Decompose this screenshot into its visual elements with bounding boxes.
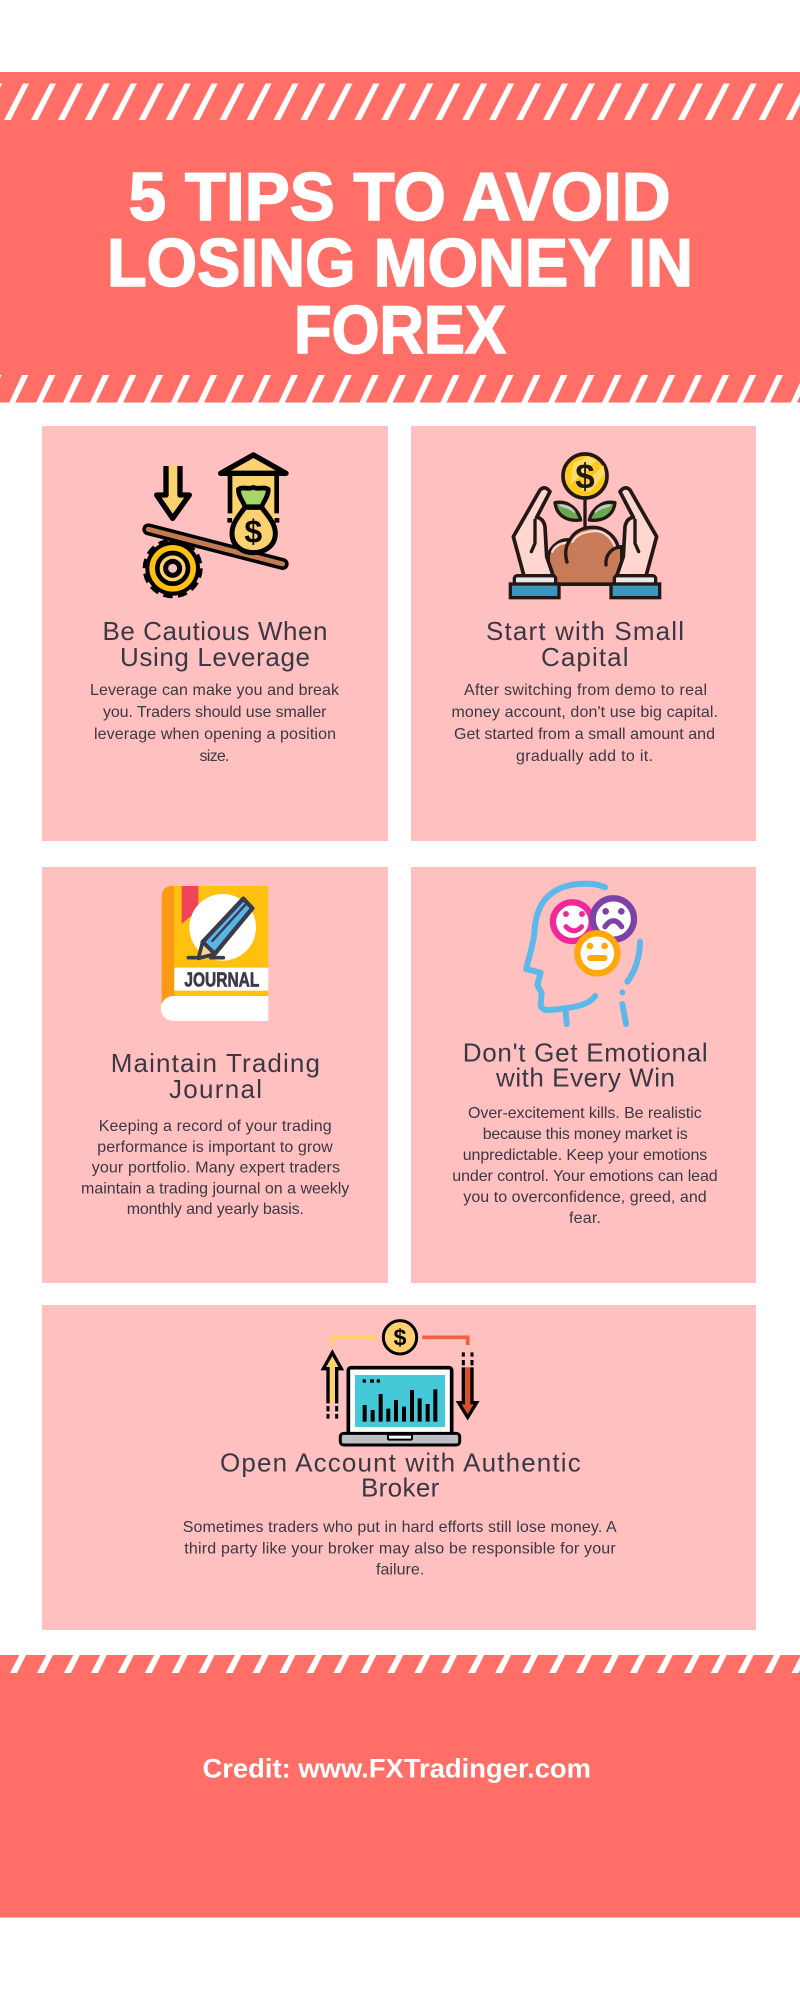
panel: footer banner	[0, 1655, 800, 1918]
heading: Broker	[361, 1473, 440, 1503]
icon: laptop with chart and arrows: $	[394, 1324, 407, 1350]
heading	[102, 616, 328, 672]
panel: maintain trading journal	[42, 867, 388, 1283]
text block: Sometimes traders who put in hard efforts still lose money. A	[183, 1519, 617, 1536]
icon: lever with money bag and gear: $	[244, 513, 262, 549]
title	[107, 159, 693, 368]
panel: start with small capital	[411, 426, 756, 841]
heading: Be Cautious When	[102, 616, 328, 646]
text block	[90, 682, 340, 765]
heading: Using Leverage	[120, 642, 310, 672]
text block: size.	[200, 748, 230, 765]
text block: After switching from demo to real	[464, 682, 707, 699]
panel: don't get emotional	[411, 867, 756, 1283]
text block	[452, 682, 718, 765]
heading: Maintain Trading	[111, 1048, 320, 1078]
heading	[463, 1038, 708, 1093]
text block: Keeping a record of your trading	[99, 1118, 332, 1135]
heading: Journal	[169, 1074, 262, 1104]
heading	[486, 616, 684, 672]
text block: fear.	[569, 1210, 601, 1227]
panel: be cautious with leverage	[42, 426, 388, 841]
text block	[183, 1519, 617, 1579]
text block	[81, 1118, 349, 1218]
icon: head with emotion faces	[526, 884, 640, 1024]
icon: lever with money bag and gear	[145, 455, 286, 596]
text block: Leverage can make you and break	[90, 682, 340, 699]
heading: Start with Small	[486, 616, 684, 646]
heading: Open Account with Authentic	[220, 1448, 581, 1478]
text block: your portfolio. Many expert traders	[92, 1160, 340, 1177]
text block: under control. Your emotions can lead	[452, 1168, 718, 1185]
title: 5 TIPS TO AVOID	[129, 159, 671, 235]
text block: you to overconfidence, greed, and	[463, 1189, 707, 1206]
text block: because this money market is	[483, 1126, 688, 1143]
text block: Get started from a small amount and	[454, 726, 715, 743]
text block: performance is important to grow	[97, 1139, 333, 1156]
text block: gradually add to it.	[516, 748, 653, 765]
title: FOREX	[294, 292, 506, 368]
text block	[452, 1105, 718, 1227]
heading: Capital	[541, 642, 628, 672]
text block: unpredictable. Keep your emotions	[463, 1147, 707, 1164]
icon: laptop with chart and arrows	[323, 1321, 477, 1445]
text block: third party like your broker may also be responsible for your	[184, 1541, 616, 1558]
title: LOSING MONEY IN	[107, 225, 693, 301]
text block: failure.	[376, 1562, 424, 1579]
heading	[220, 1448, 581, 1503]
text block: Over-excitement kills. Be realistic	[468, 1105, 702, 1122]
credit text: Credit: www.FXTradinger.com	[202, 1754, 591, 1784]
heading	[111, 1048, 320, 1104]
heading: Don't Get Emotional	[463, 1038, 708, 1068]
text block: maintain a trading journal on a weekly	[81, 1180, 349, 1197]
icon: hands protecting coin plant	[510, 454, 660, 598]
icon: hands protecting coin plant: $	[575, 457, 595, 496]
panel: header banner	[0, 72, 800, 402]
heading: with Every Win	[495, 1063, 675, 1093]
text block: you. Traders should use smaller	[103, 704, 327, 721]
text block: leverage when opening a position	[94, 726, 336, 743]
icon: journal book with pencil	[161, 886, 268, 1021]
text block: money account, don't use big capital.	[452, 704, 718, 721]
icon: journal book with pencil: JOURNAL	[184, 969, 259, 992]
text block: monthly and yearly basis.	[127, 1201, 304, 1218]
panel: open account with authentic broker	[42, 1305, 756, 1630]
